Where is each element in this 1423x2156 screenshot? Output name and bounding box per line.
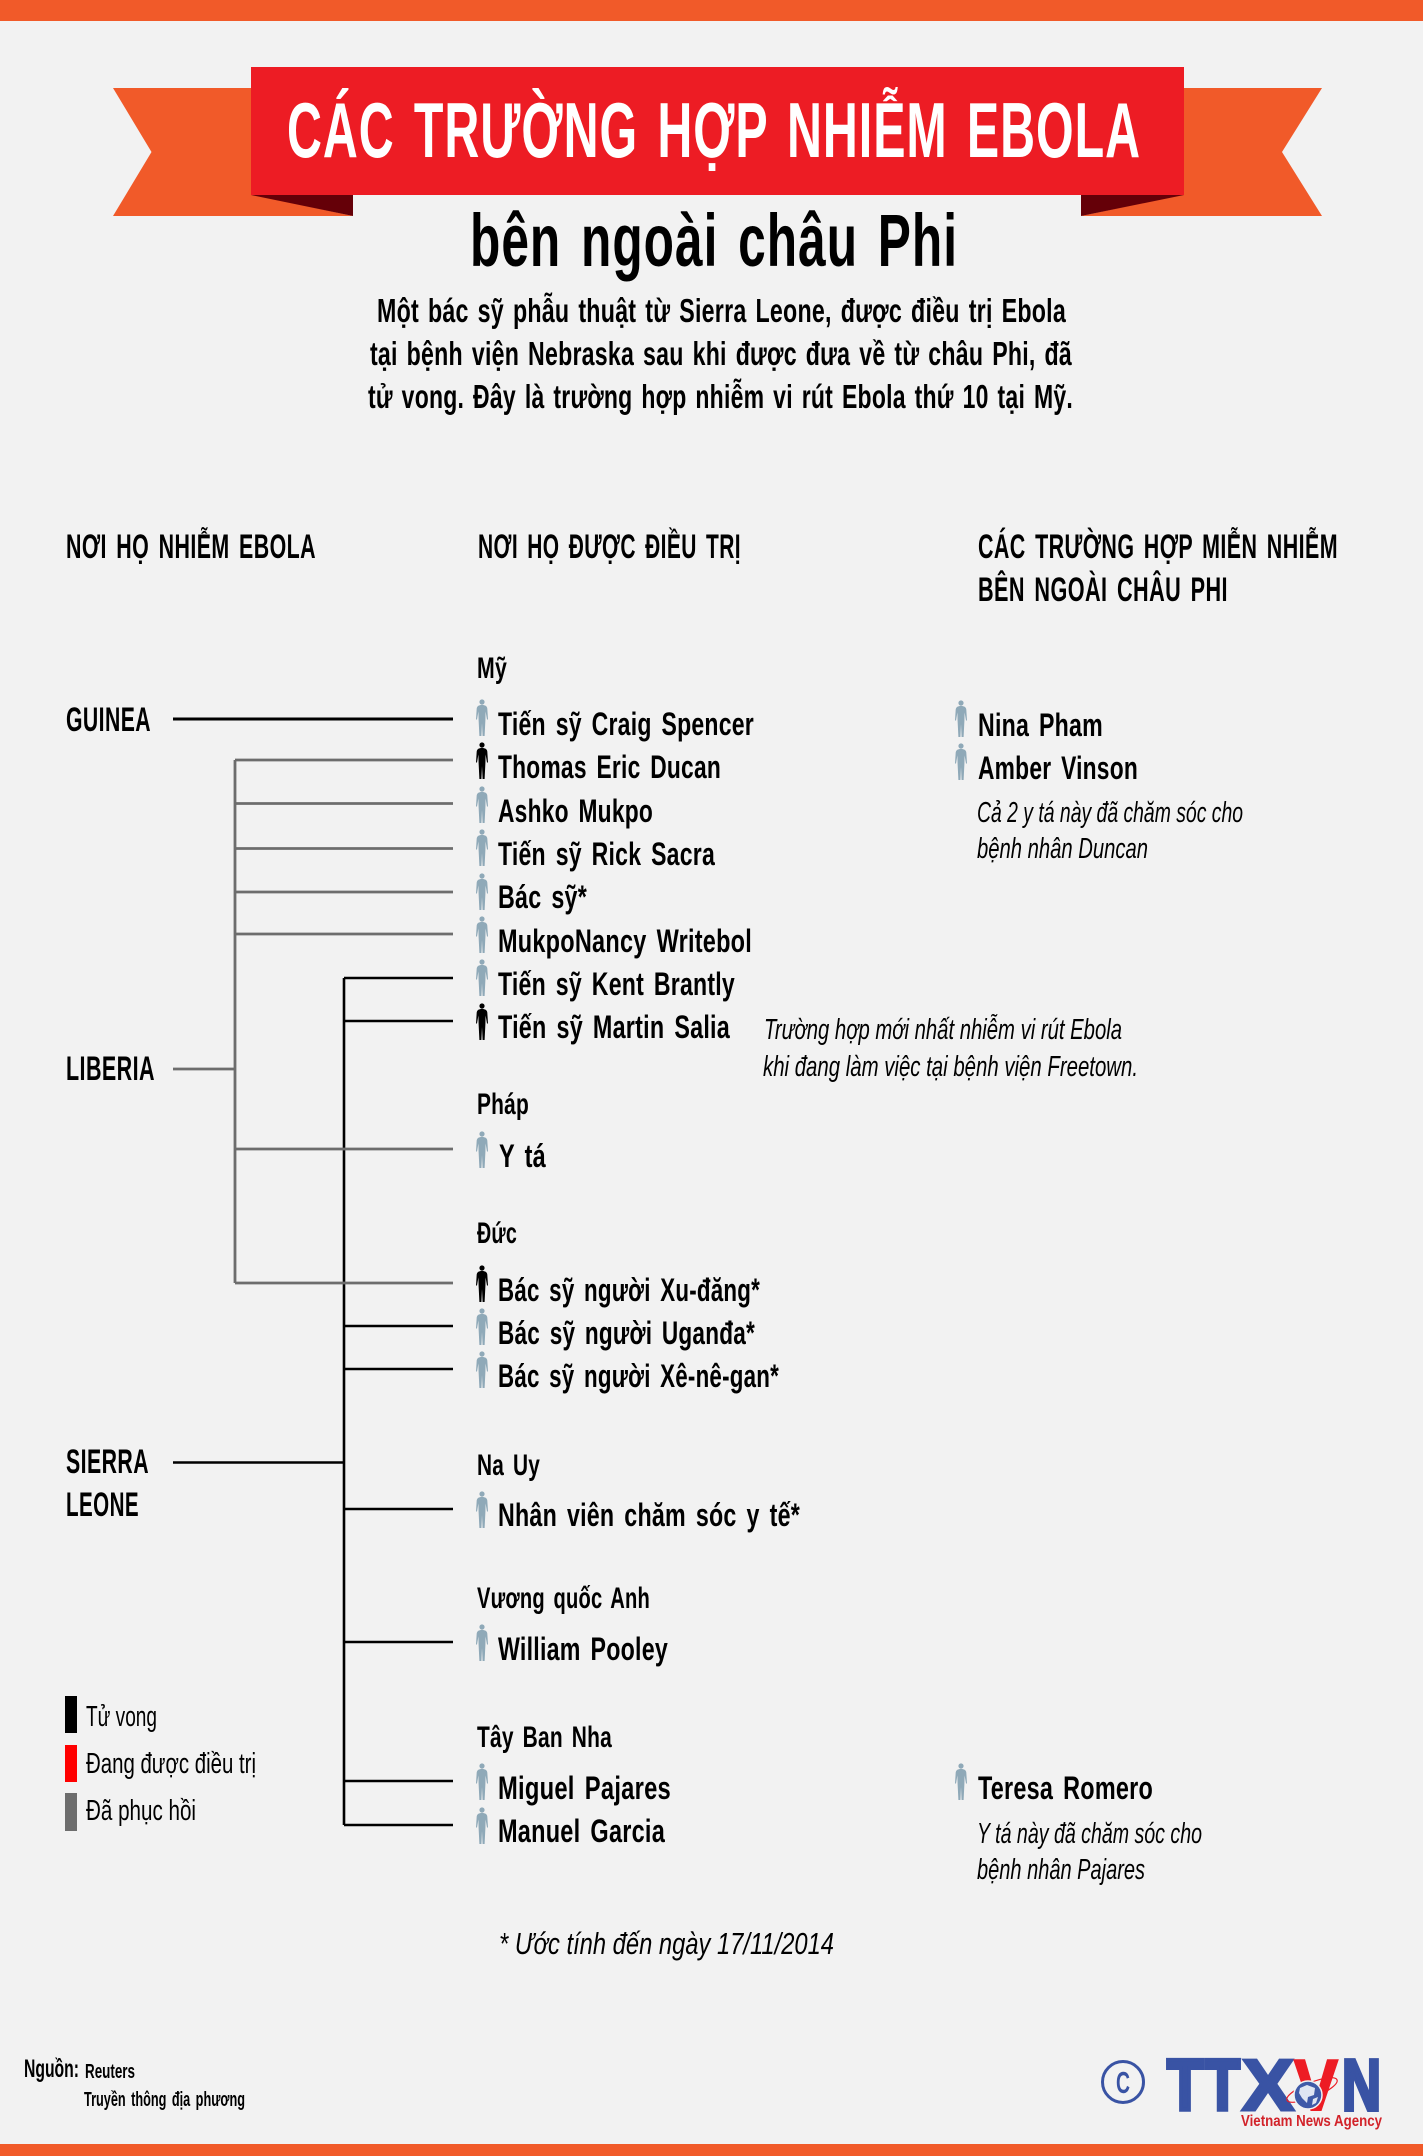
icon: person deceased: [476, 742, 488, 779]
case: Ugandan doctor: [476, 1308, 755, 1351]
legend: [65, 1696, 256, 1831]
logo globe: [1294, 2081, 1322, 2109]
country label: Sierra Leone: [66, 1443, 149, 1524]
icon: person recovered: [476, 873, 488, 910]
source: Truyền thông địa phương: [84, 2089, 245, 2111]
case: Craig Spencer: [476, 699, 754, 742]
icon: person recovered: [476, 916, 488, 953]
note: nurses: Cả 2 y tá này đã chăm sóc cho: [977, 797, 1243, 829]
name: Bác sỹ người Uganđa*: [498, 1315, 755, 1351]
logo letter X: X: [1242, 2046, 1294, 2126]
icon: person recovered: [476, 1131, 488, 1168]
ribbon right fold: [1081, 195, 1184, 216]
country label: Guinea: GUINEA: [66, 701, 151, 739]
name: Bác sỹ người Xu-đăng*: [498, 1272, 760, 1308]
legend: recovered: [65, 1793, 196, 1831]
note: nurses: [977, 797, 1243, 865]
group label: Spain: Tây Ban Nha: [477, 1721, 612, 1754]
source: Nguồn:: [24, 2055, 79, 2083]
intro paragraph: tử vong. Đây là trường hợp nhiễm vi rút Ebola thứ 10 tại Mỹ.: [368, 378, 1073, 415]
case: Sudanese doctor: [476, 1265, 760, 1308]
subtitle: bên ngoài châu Phi: [470, 199, 958, 282]
logo orbit: [1284, 2073, 1340, 2107]
intro paragraph: [368, 292, 1073, 415]
name: Nhân viên chăm sóc y tế*: [498, 1497, 800, 1533]
country label: Sierra Leone: LEONE: [66, 1486, 139, 1524]
icon: copyright: C: [1116, 2065, 1130, 2100]
red banner: [251, 67, 1184, 195]
name: MukpoNancy Writebol: [498, 923, 752, 959]
column heading: where infected: NƠI HỌ NHIỄM EBOLA: [66, 528, 316, 566]
note: Martin Salia: Trường hợp mới nhất nhiễm vi rút Ebola: [764, 1013, 1122, 1046]
ribbon left fold: [251, 195, 353, 216]
note: nurses: bệnh nhân Duncan: [977, 833, 1148, 865]
case: Thomas Eric Ducan: [476, 742, 721, 785]
icon: copyright: [1102, 2062, 1144, 2102]
secondary case: Nina Pham: [955, 700, 1103, 743]
name: Ashko Mukpo: [498, 793, 653, 829]
icon: person recovered: [476, 1491, 488, 1528]
icon: person recovered: [955, 743, 967, 780]
case: William Pooley: [476, 1624, 668, 1667]
name: Y tá: [499, 1138, 546, 1174]
group label: Norway: Na Uy: [477, 1449, 540, 1482]
name: Manuel Garcia: [498, 1813, 665, 1849]
country label: Liberia: LIBERIA: [66, 1050, 155, 1088]
icon: person recovered: [476, 1807, 488, 1844]
name: Tiến sỹ Rick Sacra: [498, 836, 715, 872]
intro paragraph: tại bệnh viện Nebraska sau khi được đưa về từ châu Phi, đã: [370, 335, 1072, 372]
icon: person recovered: [476, 1308, 488, 1345]
case: Senegalese doctor: [476, 1351, 779, 1394]
group label: Germany: Đức: [477, 1217, 517, 1250]
footnote: * Ước tính đến ngày 17/11/2014: [499, 1926, 834, 1961]
title banner: [113, 67, 1322, 216]
name: Nina Pham: [978, 707, 1103, 743]
logo letter N: N: [1342, 2046, 1381, 2126]
connector lines: Sierra Leone (black): [173, 978, 453, 1825]
icon: person recovered: [955, 1763, 967, 1800]
icon: person recovered: [476, 1351, 488, 1388]
group label: France: Pháp: [477, 1088, 529, 1121]
name: Tiến sỹ Martin Salia: [498, 1009, 730, 1045]
case: Rick Sacra: [476, 829, 715, 872]
name: Bác sỹ người Xê-nê-gan*: [498, 1358, 779, 1394]
logo: TTXVN: [1167, 2046, 1382, 2130]
name: Tiến sỹ Kent Brantly: [498, 966, 735, 1002]
case: Manuel Garcia: [476, 1807, 665, 1849]
ribbon left tail: [113, 88, 353, 216]
icon: person recovered: [476, 959, 488, 996]
name: Tiến sỹ Craig Spencer: [498, 706, 754, 742]
case: Martin Salia: [476, 1003, 730, 1045]
case: nurse: [476, 1131, 546, 1174]
logo tagline: Vietnam News Agency: [1241, 2113, 1382, 2130]
column heading: where treated: NƠI HỌ ĐƯỢC ĐIỀU TRỊ: [478, 528, 741, 566]
note: Teresa Romero: Y tá này đã chăm sóc cho: [977, 1818, 1202, 1850]
bottom orange bar: [0, 2144, 1423, 2156]
intro paragraph: Một bác sỹ phẫu thuật từ Sierra Leone, được điều trị Ebola: [377, 292, 1066, 329]
source: [24, 2055, 245, 2111]
connector line: Guinea (black): [173, 718, 453, 720]
icon: person recovered: [476, 1624, 488, 1661]
logo letter V: V: [1294, 2046, 1338, 2126]
note: Martin Salia: [763, 1013, 1138, 1083]
case: health worker: [476, 1491, 800, 1533]
case: doctor: [476, 873, 587, 915]
country label: Sierra Leone: SIERRA: [66, 1443, 149, 1481]
case: Kent Brantly: [476, 959, 735, 1002]
icon: person recovered: [955, 700, 967, 737]
secondary case: Teresa Romero: [955, 1763, 1153, 1806]
icon: person recovered: [476, 699, 488, 736]
icon: person deceased: [476, 1265, 488, 1302]
group label: United Kingdom: Vương quốc Anh: [477, 1582, 650, 1615]
legend: deceased: [65, 1696, 157, 1733]
connector lines: Liberia (grey): [173, 760, 453, 1283]
legend: under treatment: Đang được điều trị: [86, 1748, 256, 1780]
name: William Pooley: [498, 1631, 668, 1667]
icon: person recovered: [476, 829, 488, 866]
column heading: secondary cases: [978, 528, 1338, 609]
legend: under treatment: [65, 1745, 256, 1782]
name: Amber Vinson: [978, 750, 1138, 786]
legend: recovered: Đã phục hồi: [86, 1795, 196, 1827]
name: Thomas Eric Ducan: [498, 749, 721, 785]
top orange bar: [0, 0, 1423, 21]
icon: person deceased: [476, 1003, 488, 1040]
name: Miguel Pajares: [498, 1770, 671, 1806]
note: Martin Salia: khi đang làm việc tại bệnh viện Freetown.: [763, 1051, 1138, 1083]
secondary case: Amber Vinson: [955, 743, 1138, 786]
icon: person recovered: [476, 786, 488, 823]
name: Teresa Romero: [978, 1770, 1153, 1806]
ribbon right tail: [1081, 88, 1322, 216]
case: Miguel Pajares: [476, 1763, 671, 1806]
case: Ashko Mukpo: [476, 786, 653, 829]
group label: USA: Mỹ: [477, 652, 507, 685]
column heading: secondary cases: BÊN NGOÀI CHÂU PHI: [978, 571, 1228, 609]
icon: person recovered: [476, 1763, 488, 1800]
note: Teresa Romero: [977, 1818, 1202, 1886]
name: Bác sỹ*: [498, 879, 587, 915]
note: Teresa Romero: bệnh nhân Pajares: [977, 1854, 1145, 1886]
source: Reuters: [85, 2061, 135, 2083]
case: Nancy Writebol: [476, 916, 752, 959]
logo letters T T: T: [1167, 2046, 1203, 2126]
logo second T: T: [1205, 2046, 1240, 2126]
legend: deceased: Tử vong: [86, 1701, 157, 1733]
